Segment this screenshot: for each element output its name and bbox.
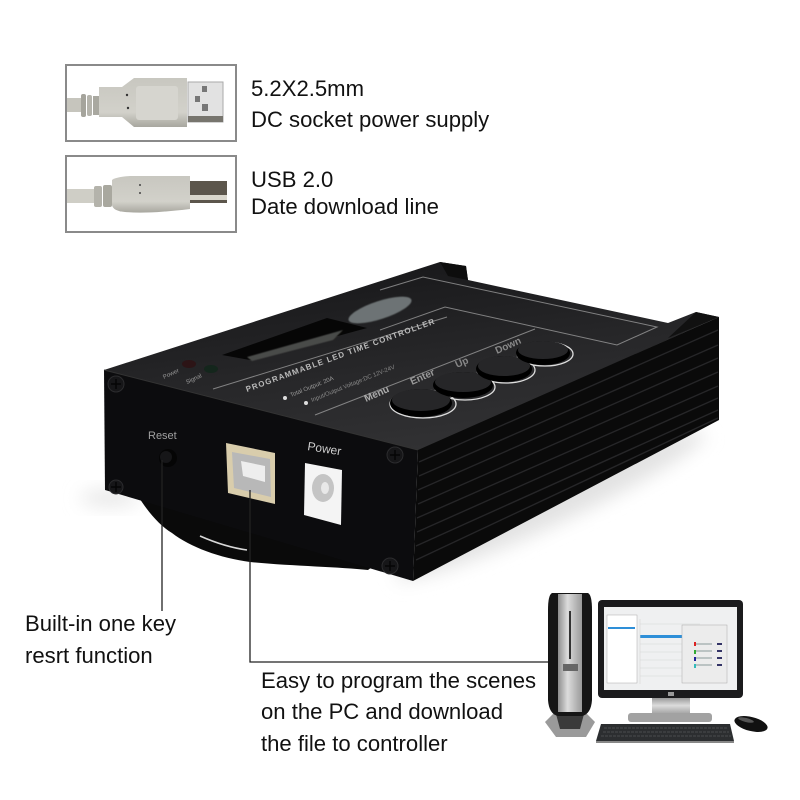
illustration: desktop PC xyxy=(545,593,769,743)
photo: LED controller: Enter xyxy=(409,367,437,388)
front face xyxy=(104,370,418,581)
text: reset function label: Built-in one key xyxy=(25,611,176,636)
buttons xyxy=(390,341,573,418)
text: program scenes label xyxy=(261,668,536,756)
photo: LED controller: Power xyxy=(162,368,180,381)
text: DC socket label xyxy=(251,76,489,132)
photo: LED controller: PROGRAMMABLE LED TIME CONTROLLER xyxy=(245,317,436,394)
photo: LED controller: Down xyxy=(494,336,523,357)
text: USB label: Date download line xyxy=(251,194,439,219)
text: DC socket label: DC socket power supply xyxy=(251,107,489,132)
arrow: reset leader line xyxy=(161,460,163,611)
photo: LED controller: Menu xyxy=(363,384,391,405)
panel: USB B connector photo xyxy=(66,156,236,232)
LCD display xyxy=(222,318,367,360)
text: DC socket label: 5.2X2.5mm xyxy=(251,76,364,101)
photo: LED controller: Total Output: 20A xyxy=(290,376,335,399)
keyboard xyxy=(596,724,734,743)
USB port xyxy=(226,443,275,504)
text: program scenes label: on the PC and download xyxy=(261,699,503,724)
photo: LED controller: Up xyxy=(454,355,470,371)
photo: LED controller: Reset xyxy=(148,430,177,442)
mouse xyxy=(733,713,769,735)
panel: USB A connector photo xyxy=(66,65,236,141)
arrow: USB to PC leader line xyxy=(250,490,549,662)
screws xyxy=(108,376,403,574)
text: USB label xyxy=(251,167,439,219)
tower xyxy=(545,593,595,737)
photo: LED controller: Input/Output Voltage:DC 12V-24V xyxy=(311,365,396,404)
LED indicators xyxy=(182,360,196,368)
top surface xyxy=(104,262,719,451)
text: program scenes label: the file to controller xyxy=(261,731,448,756)
mounting plate xyxy=(138,496,372,570)
monitor xyxy=(598,600,743,722)
text: reset function label: resrt function xyxy=(25,643,153,668)
power port xyxy=(304,463,342,525)
photo: LED controller xyxy=(80,262,719,595)
printed lines and text xyxy=(213,277,657,415)
photo: LED controller: Power xyxy=(307,439,342,458)
side face with ribs xyxy=(413,317,719,581)
text: USB label: USB 2.0 xyxy=(251,167,333,192)
text: program scenes label: Easy to program the scenes xyxy=(261,668,536,693)
text: reset function label xyxy=(25,611,176,668)
photo: LED controller: Signal xyxy=(185,373,203,386)
reset button xyxy=(159,449,177,467)
